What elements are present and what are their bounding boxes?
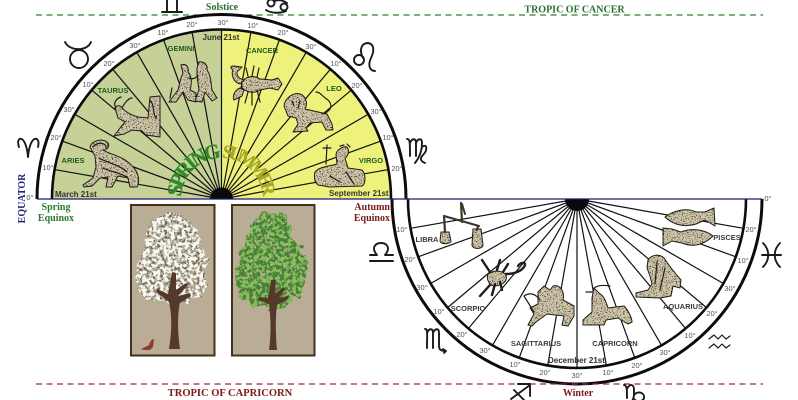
summer sector fill: [222, 30, 391, 199]
icon: libra glyph: [370, 243, 393, 261]
panel: blossoming tree: [131, 205, 214, 356]
degree labels lower: 30°: [659, 348, 671, 357]
trunk: [156, 272, 191, 349]
degree labels lower: 30°: [416, 283, 428, 292]
figure: aries ram: [83, 140, 139, 187]
sign label: scorpio: SCORPIO: [451, 304, 485, 313]
degree labels upper: 30°: [305, 42, 317, 51]
spokes lower: [411, 199, 743, 368]
frame: [131, 205, 214, 356]
degree labels lower: 10°: [602, 368, 614, 377]
curved title: spring: SPRING: [168, 144, 220, 196]
panel: upper half dial, spring and summer: [37, 14, 406, 199]
degree labels upper: 20°: [351, 81, 363, 90]
degree labels lower: 0°: [764, 194, 772, 203]
degree labels upper: 30°: [217, 18, 229, 27]
axis label: equator: EQUATOR: [17, 173, 28, 223]
degree labels upper: 20°: [391, 164, 403, 173]
figure: scorpio: [480, 260, 525, 296]
icon: pisces glyph: [762, 243, 781, 267]
frame: [232, 205, 314, 356]
degree labels lower: 10°: [396, 225, 408, 234]
degree labels upper: 20°: [50, 133, 62, 142]
inner arc lower: [408, 199, 746, 368]
inner arc upper: [52, 29, 391, 199]
degree labels upper: 0°: [26, 193, 34, 202]
sign label: taurus: TAURUS: [98, 86, 128, 95]
degree labels upper: 30°: [63, 105, 75, 114]
label: autumn equinox: Equinox: [354, 213, 390, 224]
degree labels lower: 30°: [479, 346, 491, 355]
degree labels lower: 20°: [404, 255, 416, 264]
degree labels upper: 10°: [42, 163, 54, 172]
degree labels lower: 20°: [631, 361, 643, 370]
icon: scorpio glyph: [425, 329, 446, 353]
degree labels lower: 30°: [571, 371, 583, 380]
heading: tropic of cancer: TROPIC OF CANCER: [524, 4, 625, 16]
panel: green leafy tree: [232, 205, 314, 356]
date: march 21st: March 21st: [55, 190, 97, 199]
icon: aries glyph: [18, 139, 39, 157]
date: december 21st: December 21st: [548, 356, 605, 365]
date: june 21st: June 21st: [203, 33, 240, 42]
sign label: aries: ARIES: [62, 156, 84, 165]
sign label: aquarius: AQUARIUS: [663, 302, 703, 311]
figure: sagittarius centaur: [524, 286, 574, 326]
degree labels lower: 20°: [456, 330, 468, 339]
degree labels lower: 10°: [684, 331, 696, 340]
degree labels upper: 20°: [277, 28, 289, 37]
degree labels upper: 10°: [330, 59, 342, 68]
canopy light leaves: [236, 212, 305, 308]
tropic of capricorn dashed line: [36, 383, 763, 385]
panel: lower half dial, autumn and winter: [392, 199, 762, 384]
spring sector fill: [52, 30, 222, 199]
icon: aquarius glyph: [709, 335, 730, 348]
degree labels lower: 30°: [724, 284, 736, 293]
figure: gemini twins: [169, 62, 217, 102]
label: spring equinox: Spring: [42, 202, 70, 213]
icon: virgo glyph: [407, 139, 426, 163]
sign label: capricorn: CAPRICORN: [592, 339, 638, 348]
icon: taurus glyph: [65, 42, 91, 68]
bird: [141, 339, 154, 350]
spoke hub lower: [565, 199, 589, 211]
canopy dark specks: [137, 212, 206, 303]
degree labels upper: 20°: [186, 20, 198, 29]
heading: tropic of capricorn: TROPIC OF CAPRICORN: [168, 388, 293, 399]
trunk: [258, 280, 288, 350]
figure: leo lion: [284, 92, 333, 132]
spoke hub upper: [210, 188, 233, 199]
canopy base: [236, 212, 305, 308]
icon: leo glyph: [354, 43, 375, 71]
sign label: leo: LEO: [326, 84, 342, 93]
degree labels upper: 20°: [103, 59, 115, 68]
sign label: pisces: PISCES: [713, 233, 741, 242]
figure: libra scales: [440, 203, 483, 248]
degree labels upper: [26, 18, 403, 202]
sign label: sagittarius: SAGITTARIUS: [511, 339, 561, 348]
icon: capricorn glyph: [624, 385, 644, 400]
outer arc upper: [37, 14, 406, 199]
figure: taurus bull: [114, 96, 160, 137]
spokes upper: [55, 30, 388, 199]
degree labels lower: [396, 194, 772, 380]
degree labels upper: 30°: [370, 107, 382, 116]
degree labels lower: 10°: [737, 256, 749, 265]
outer arc lower: [392, 199, 762, 384]
degree labels upper: 10°: [82, 80, 94, 89]
sign label: virgo: VIRGO: [359, 156, 383, 165]
figure: pisces fish: [663, 208, 715, 246]
curved title: summer: SUMMER: [222, 146, 274, 197]
label: spring equinox: Equinox: [38, 213, 74, 224]
icon: cancer glyph: [266, 0, 288, 13]
tropic of cancer dashed line: [36, 14, 763, 16]
sign label: libra: LIBRA: [416, 235, 439, 244]
degree labels lower: 10°: [509, 360, 521, 369]
figure: aquarius: [636, 255, 681, 298]
degree labels lower: 20°: [706, 309, 718, 318]
degree labels upper: 10°: [157, 28, 169, 37]
sign label: gemini: GEMINI: [168, 44, 194, 53]
sign label: cancer: CANCER: [246, 46, 279, 55]
canopy white blossoms: [137, 212, 206, 303]
figure: capricorn goat: [583, 285, 632, 325]
icon: sagittarius glyph: [511, 384, 530, 400]
degree labels upper: 30°: [129, 41, 141, 50]
icon: gemini glyph: [162, 0, 182, 12]
heading: winter: Winter: [563, 388, 594, 399]
equator line: [37, 198, 762, 200]
figure: virgo maiden: [314, 144, 365, 187]
degree labels lower: 20°: [745, 225, 757, 234]
date: september 21st: September 21st: [329, 189, 389, 198]
label: autumn equinox: Autumn: [354, 202, 390, 213]
degree labels upper: 10°: [382, 133, 394, 142]
figure: cancer crayfish: [231, 66, 282, 105]
degree labels lower: 20°: [539, 368, 551, 377]
heading: solstice: Solstice: [206, 2, 239, 13]
degree labels upper: 10°: [247, 21, 259, 30]
degree labels lower: 10°: [433, 307, 445, 316]
